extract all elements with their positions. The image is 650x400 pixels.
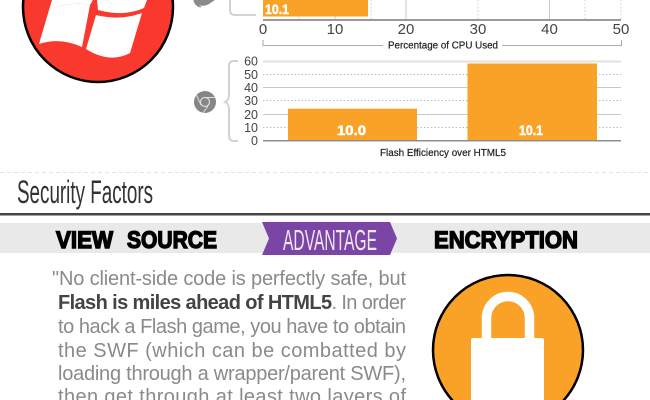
- icon: padlock circle: [433, 275, 583, 400]
- y axis labels: 0: [251, 134, 258, 148]
- x axis labels: 50: [613, 21, 629, 38]
- heading: Security Factors: Security Factors: [17, 174, 153, 210]
- axis title: Flash Efficiency over HTML5: [380, 148, 506, 159]
- label: advantage ribbon: ADVANTAGE: [283, 225, 377, 257]
- chart: percentage of CPU used: [230, 0, 629, 52]
- y axis labels: 50: [244, 68, 258, 82]
- icon: Chrome logo: [194, 91, 216, 113]
- icon: browser icon, top chart: [194, 0, 214, 7]
- bar label: 10.1: [265, 1, 289, 17]
- x axis labels: 10: [327, 21, 343, 38]
- text block: security quote: the SWF (which can be combatted by: [58, 340, 406, 362]
- label: view source: [56, 227, 217, 254]
- text block: security quote: Flash is miles ahead of HTML5. In order: [58, 292, 406, 314]
- bar: version 10.1: [468, 64, 597, 140]
- comparison band: [0, 222, 650, 257]
- text block: security quote: loading through a wrapper/parent SWF),: [58, 363, 406, 385]
- y axis labels: 10: [244, 121, 258, 135]
- x axis labels: 0: [259, 21, 267, 38]
- chart: Flash efficiency over HTML5: [244, 54, 621, 159]
- icon: red Windows logo circle: [23, 0, 173, 82]
- text block: security quote: "No client-side code is perfectly safe, but: [52, 268, 406, 290]
- x axis labels: [259, 21, 629, 38]
- y axis labels: 40: [244, 81, 258, 95]
- bar: version 10.1: [263, 0, 368, 16]
- x axis labels: 40: [541, 21, 558, 38]
- bar label 10.0: 10.0: [337, 122, 366, 138]
- y axis labels: [244, 54, 258, 148]
- x axis labels: 20: [398, 21, 414, 38]
- bar: version 10.0: [288, 109, 417, 141]
- text block: security quote: [52, 268, 406, 400]
- label: view source: VIEW: [56, 227, 113, 254]
- y axis labels: 60: [244, 54, 258, 68]
- bar label 10.1: 10.1: [519, 122, 543, 138]
- x axis labels: 30: [470, 21, 486, 38]
- text block: security quote: to hack a Flash game, you have to obtain: [58, 316, 406, 338]
- label: encryption: ENCRYPTION: [434, 227, 578, 254]
- y axis labels: 30: [244, 94, 258, 108]
- y axis labels: 20: [244, 108, 258, 122]
- label: view source: SOURCE: [127, 227, 217, 254]
- label: advantage ribbon: [262, 222, 397, 257]
- brace: [225, 61, 238, 141]
- axis title: Percentage of CPU Used: [388, 40, 498, 52]
